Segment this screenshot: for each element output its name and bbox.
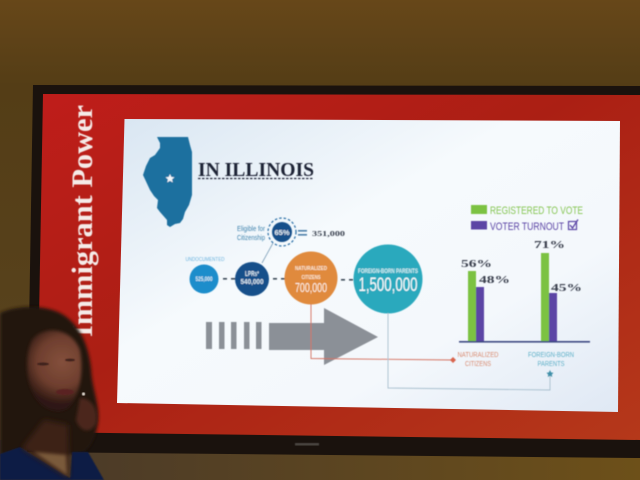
presenter earring bbox=[82, 392, 85, 396]
sidebar title: Immigrant Power bbox=[66, 105, 99, 337]
circle: LPRs bbox=[235, 262, 269, 296]
presenter neck and chest bbox=[22, 420, 69, 478]
infographic content bbox=[143, 137, 590, 390]
circle: naturalized citizens: NATURALIZED bbox=[295, 266, 327, 272]
text: eligible for citizenship bbox=[237, 224, 265, 242]
legend bbox=[471, 205, 583, 233]
stripes bbox=[206, 322, 262, 349]
value labels: 45% bbox=[551, 282, 582, 294]
circle: undocumented: 525,000 bbox=[196, 277, 213, 283]
axis label: naturalized citizens: NATURALIZED bbox=[458, 352, 498, 359]
hair curl highlights bbox=[76, 398, 97, 430]
bar chart bbox=[459, 239, 590, 343]
axis label: naturalized citizens: CITIZENS bbox=[465, 361, 491, 368]
axis label: foreign-born parents bbox=[528, 352, 574, 368]
arrow bbox=[269, 308, 378, 365]
presenter eyes bbox=[37, 359, 75, 366]
presenter mouth bbox=[56, 389, 74, 395]
monitor logo bbox=[295, 443, 319, 446]
wall below monitor bbox=[0, 440, 640, 480]
connector: foreign-born parents bbox=[388, 313, 554, 390]
circle: naturalized citizens bbox=[284, 252, 338, 304]
circle: foreign-born parents: FOREIGN-BORN PARENTS bbox=[358, 269, 418, 275]
heading: In Illinois: IN ILLINOIS bbox=[198, 159, 314, 181]
monitor bezel bbox=[27, 85, 640, 458]
presenter bbox=[0, 307, 104, 480]
presenter chest skin bbox=[34, 452, 67, 475]
circle: LPRs: LPRs* bbox=[245, 271, 259, 278]
circle: 65% eligible: 65% bbox=[274, 228, 290, 237]
presenter hair bbox=[0, 307, 98, 456]
connector line: LPRs to 65% bbox=[262, 243, 273, 263]
legend: VOTER TURNOUT bbox=[490, 221, 564, 233]
value labels bbox=[461, 239, 582, 294]
icon: star bbox=[166, 174, 174, 182]
text: eligible for citizenship: Citizenship bbox=[237, 233, 265, 242]
axis label: foreign-born parents: PARENTS bbox=[538, 361, 565, 368]
presenter shirt bbox=[0, 447, 104, 480]
circle: naturalized citizens: CITIZENS bbox=[302, 275, 321, 281]
legend: REGISTERED TO VOTE bbox=[490, 205, 583, 217]
icon: checkbox bbox=[568, 220, 578, 230]
red screen background bbox=[37, 94, 640, 440]
circle: undocumented: UNDOCUMENTED bbox=[186, 257, 225, 263]
circle: naturalized citizens: 700,000 bbox=[295, 280, 327, 295]
text: equals 351,000: 351,000 bbox=[312, 230, 346, 238]
icon: Illinois map bbox=[143, 137, 192, 227]
axis label: naturalized citizens bbox=[458, 352, 498, 368]
circle: foreign-born parents: 1,500,000 bbox=[358, 275, 418, 296]
value labels: 48% bbox=[479, 274, 510, 286]
presenter face bbox=[27, 330, 82, 411]
slide panel bbox=[117, 119, 620, 412]
text: eligible for citizenship: Eligible for bbox=[237, 224, 265, 233]
value labels: 71% bbox=[534, 239, 565, 251]
text: equals 351,000 bbox=[298, 230, 346, 238]
axis label: foreign-born parents: FOREIGN-BORN bbox=[528, 352, 574, 359]
circle: LPRs: 540,000 bbox=[240, 279, 264, 286]
connector: naturalized citizens bbox=[311, 304, 456, 363]
circle: undocumented bbox=[186, 257, 225, 294]
circle: 65% eligible bbox=[268, 218, 296, 246]
value labels: 56% bbox=[461, 258, 492, 270]
dashed connectors bbox=[223, 278, 353, 281]
circle: foreign-born parents bbox=[354, 244, 422, 314]
